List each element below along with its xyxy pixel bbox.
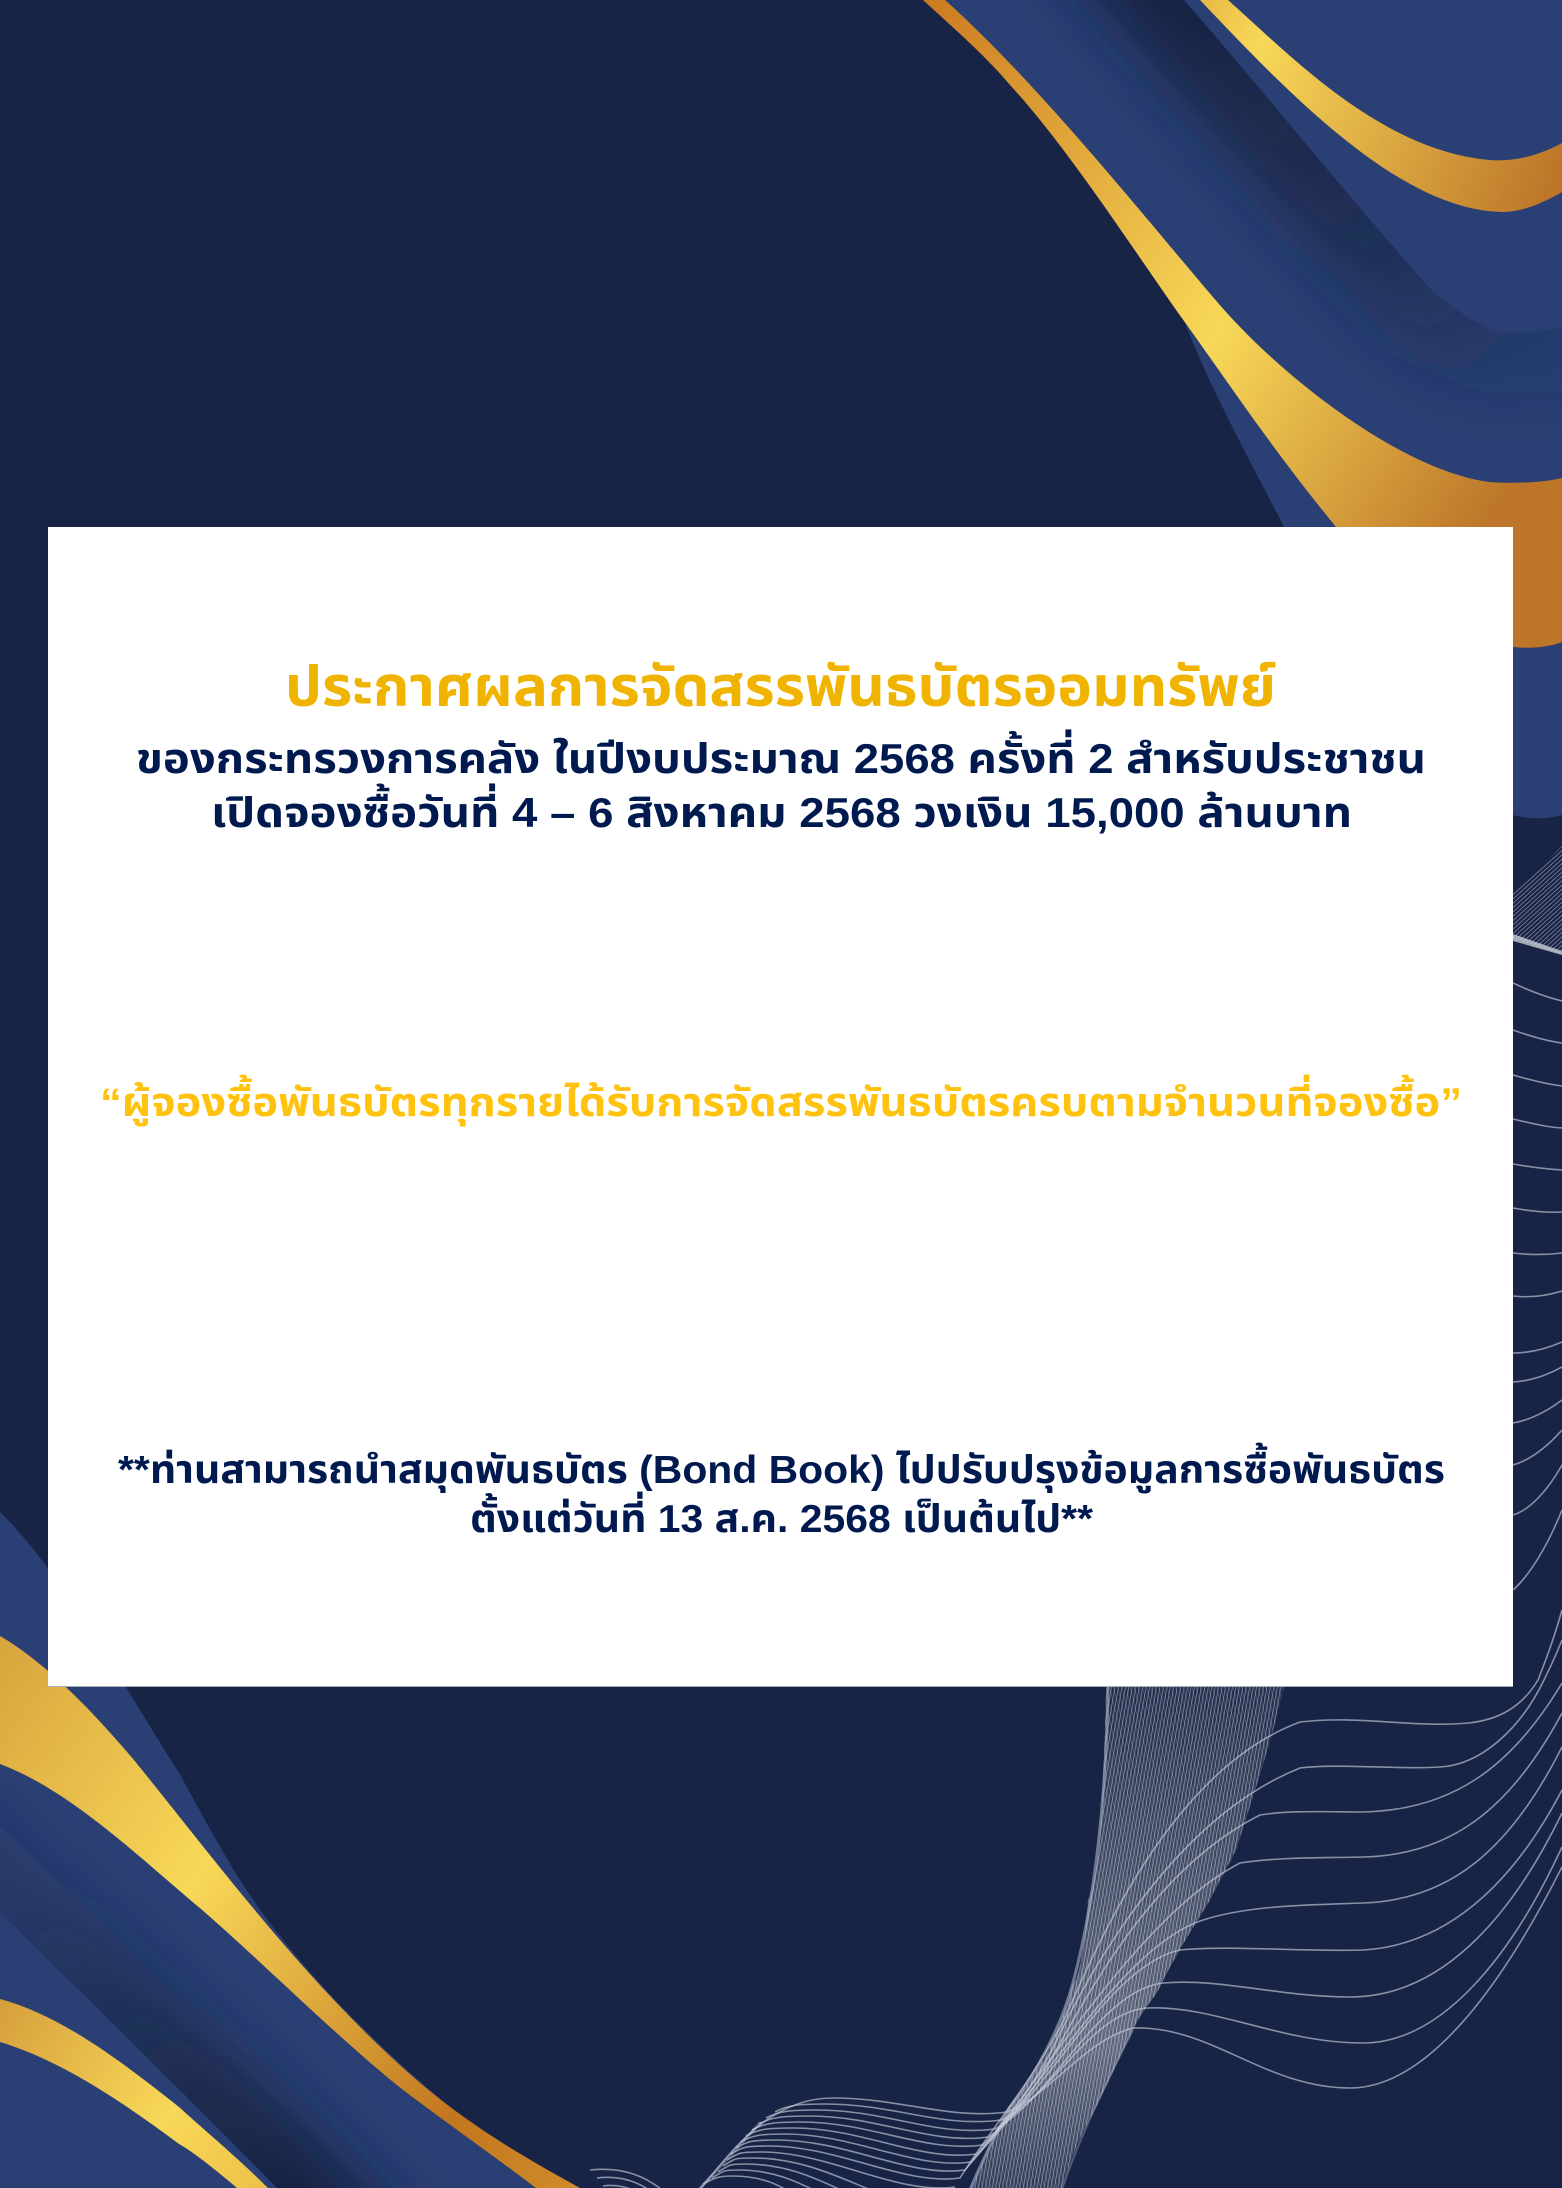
note line 1: **ท่านสามารถนำสมุดพันธบัตร (Bond Book) ไปปรับปรุงข้อมูลการซื้อพันธบัตร (118, 1442, 1445, 1493)
line mesh: bottom right (590, 846, 1562, 2188)
title: ประกาศผลการจัดสรรพันธบัตรออมทรัพย์ (285, 655, 1276, 718)
quote: “ผู้จองซื้อพันธบัตรทุกรายได้รับการจัดสรรพันธบัตรครบตามจำนวนที่จองซื้อ” (100, 1074, 1462, 1127)
note line 2: ตั้งแต่วันที่ 13 ส.ค. 2568 เป็นต้นไป** (470, 1491, 1094, 1541)
wave decoration: top right (923, 0, 1562, 818)
subtitle line 2: เปิดจองซื้อวันที่ 4 – 6 สิงหาคม 2568 วงเงิน 15,000 ล้านบาท (211, 783, 1352, 836)
subtitle line 1: ของกระทรวงการคลัง ในปีงบประมาณ 2568 ครั้งที่ 2 สำหรับประชาชน (136, 729, 1426, 782)
panel: announcement (48, 527, 1513, 1687)
wave decoration: bottom left (0, 1512, 580, 2188)
